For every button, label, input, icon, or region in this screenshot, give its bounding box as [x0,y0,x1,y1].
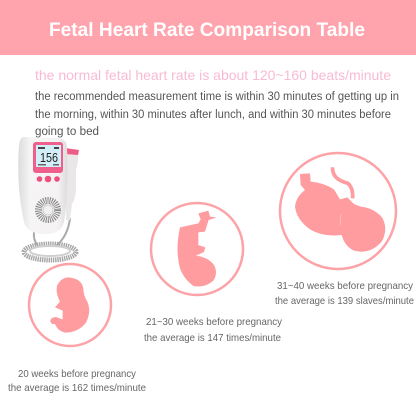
measurement advice text: going to bed [35,126,99,138]
measurement advice text: the recommended measurement time is within 30 minutes of getting up in [35,91,399,103]
icon: fetal doppler device [18,137,79,260]
caption: 21~30 weeks before pregnancy [146,317,283,328]
device cable coil [24,218,76,260]
caption: the average is 162 times/minute [8,383,146,394]
circle outline [29,264,111,346]
device probe [65,148,79,220]
circle outline [280,153,396,269]
measurement advice text [35,91,399,138]
panel: 20 weeks [8,264,146,394]
circle outline [151,203,243,295]
device body [18,137,68,234]
panel: 21-30 weeks [144,203,283,344]
caption: 20 weeks before pregnancy [18,369,137,380]
icon: early fetus [50,277,89,333]
icon: mid fetus [177,211,217,287]
measurement advice text: the morning, within 30 minutes after lunch, and within 30 minutes before [35,109,391,121]
device buttons [37,176,60,182]
device speaker grille [38,200,58,220]
title: Fetal Heart Rate Comparison Table [49,20,365,41]
icon: late fetus [295,167,385,252]
device screen: 156 [40,150,58,165]
caption: the average is 147 times/minute [144,333,281,344]
subtitle: normal heart rate: the normal fetal heart rate is about 120~160 beats/minute [35,67,391,83]
header banner [0,0,416,55]
panel: 31-40 weeks [275,153,414,307]
